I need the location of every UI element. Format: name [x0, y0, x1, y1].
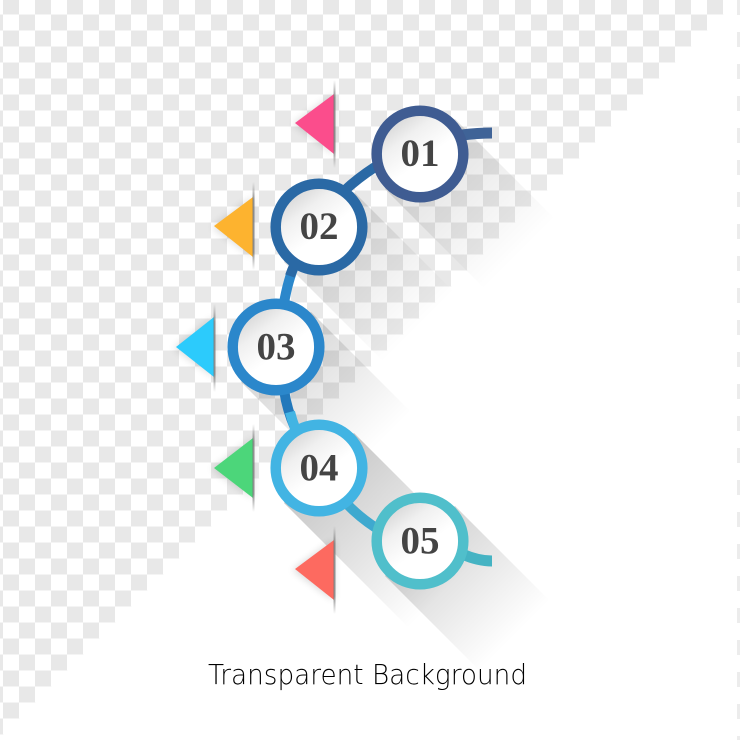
triangle: pink — [293, 80, 336, 168]
caption: Transparent Background — [208, 658, 527, 691]
step 04 — [276, 425, 362, 511]
triangle: green — [212, 424, 254, 512]
triangle: orange — [212, 182, 254, 270]
step 05: 05 — [400, 520, 440, 562]
step 05 — [377, 498, 463, 584]
step 01 — [377, 111, 463, 197]
step 03 — [233, 304, 319, 390]
connector line — [284, 133, 492, 561]
step 02 — [276, 184, 362, 270]
long shadows — [241, 119, 575, 696]
triangle: red — [293, 526, 336, 614]
step 01: 01 — [400, 132, 440, 175]
triangle: cyan — [174, 304, 216, 392]
step 04: 04 — [300, 446, 338, 490]
step 02: 02 — [300, 205, 338, 248]
step 03: 03 — [256, 326, 296, 368]
